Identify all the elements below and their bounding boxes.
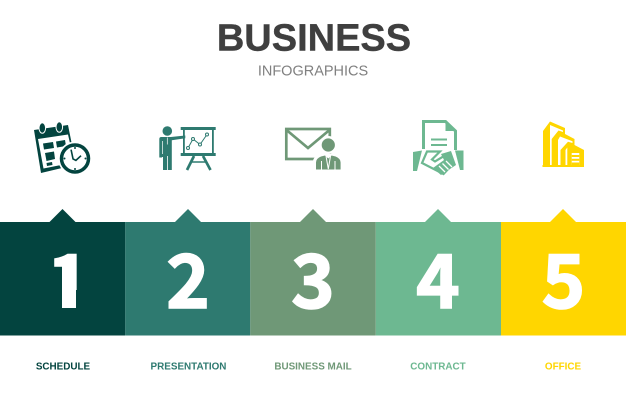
icon: envelope with person: [286, 129, 343, 170]
band 2: presentation: 2: [166, 223, 210, 330]
icon: office buildings: [542, 122, 584, 167]
label: contract: CONTRACT: [410, 362, 466, 372]
title: BUSINESS: [217, 18, 411, 60]
band 1: schedule: [0, 209, 125, 336]
band 4: contract: [376, 209, 501, 336]
label: presentation: PRESENTATION: [151, 362, 226, 372]
band 4: contract: 4: [416, 223, 460, 330]
label: office: OFFICE: [545, 362, 582, 372]
band 2: presentation: [125, 209, 250, 336]
band 3: business mail: [250, 209, 376, 336]
subtitle: INFOGRAPHICS: [258, 64, 368, 80]
band 5: office: 5: [542, 223, 585, 330]
band 5: office: [501, 209, 626, 336]
icon: document and handshake: [413, 121, 464, 175]
band 3: business mail: 3: [291, 223, 335, 330]
icon: calendar and clock: [34, 122, 92, 176]
band 1: schedule: 1: [47, 223, 91, 330]
label: business mail: BUSINESS MAIL: [274, 362, 352, 372]
icon: presenter with board: [159, 126, 216, 170]
label: schedule: SCHEDULE: [36, 362, 91, 372]
